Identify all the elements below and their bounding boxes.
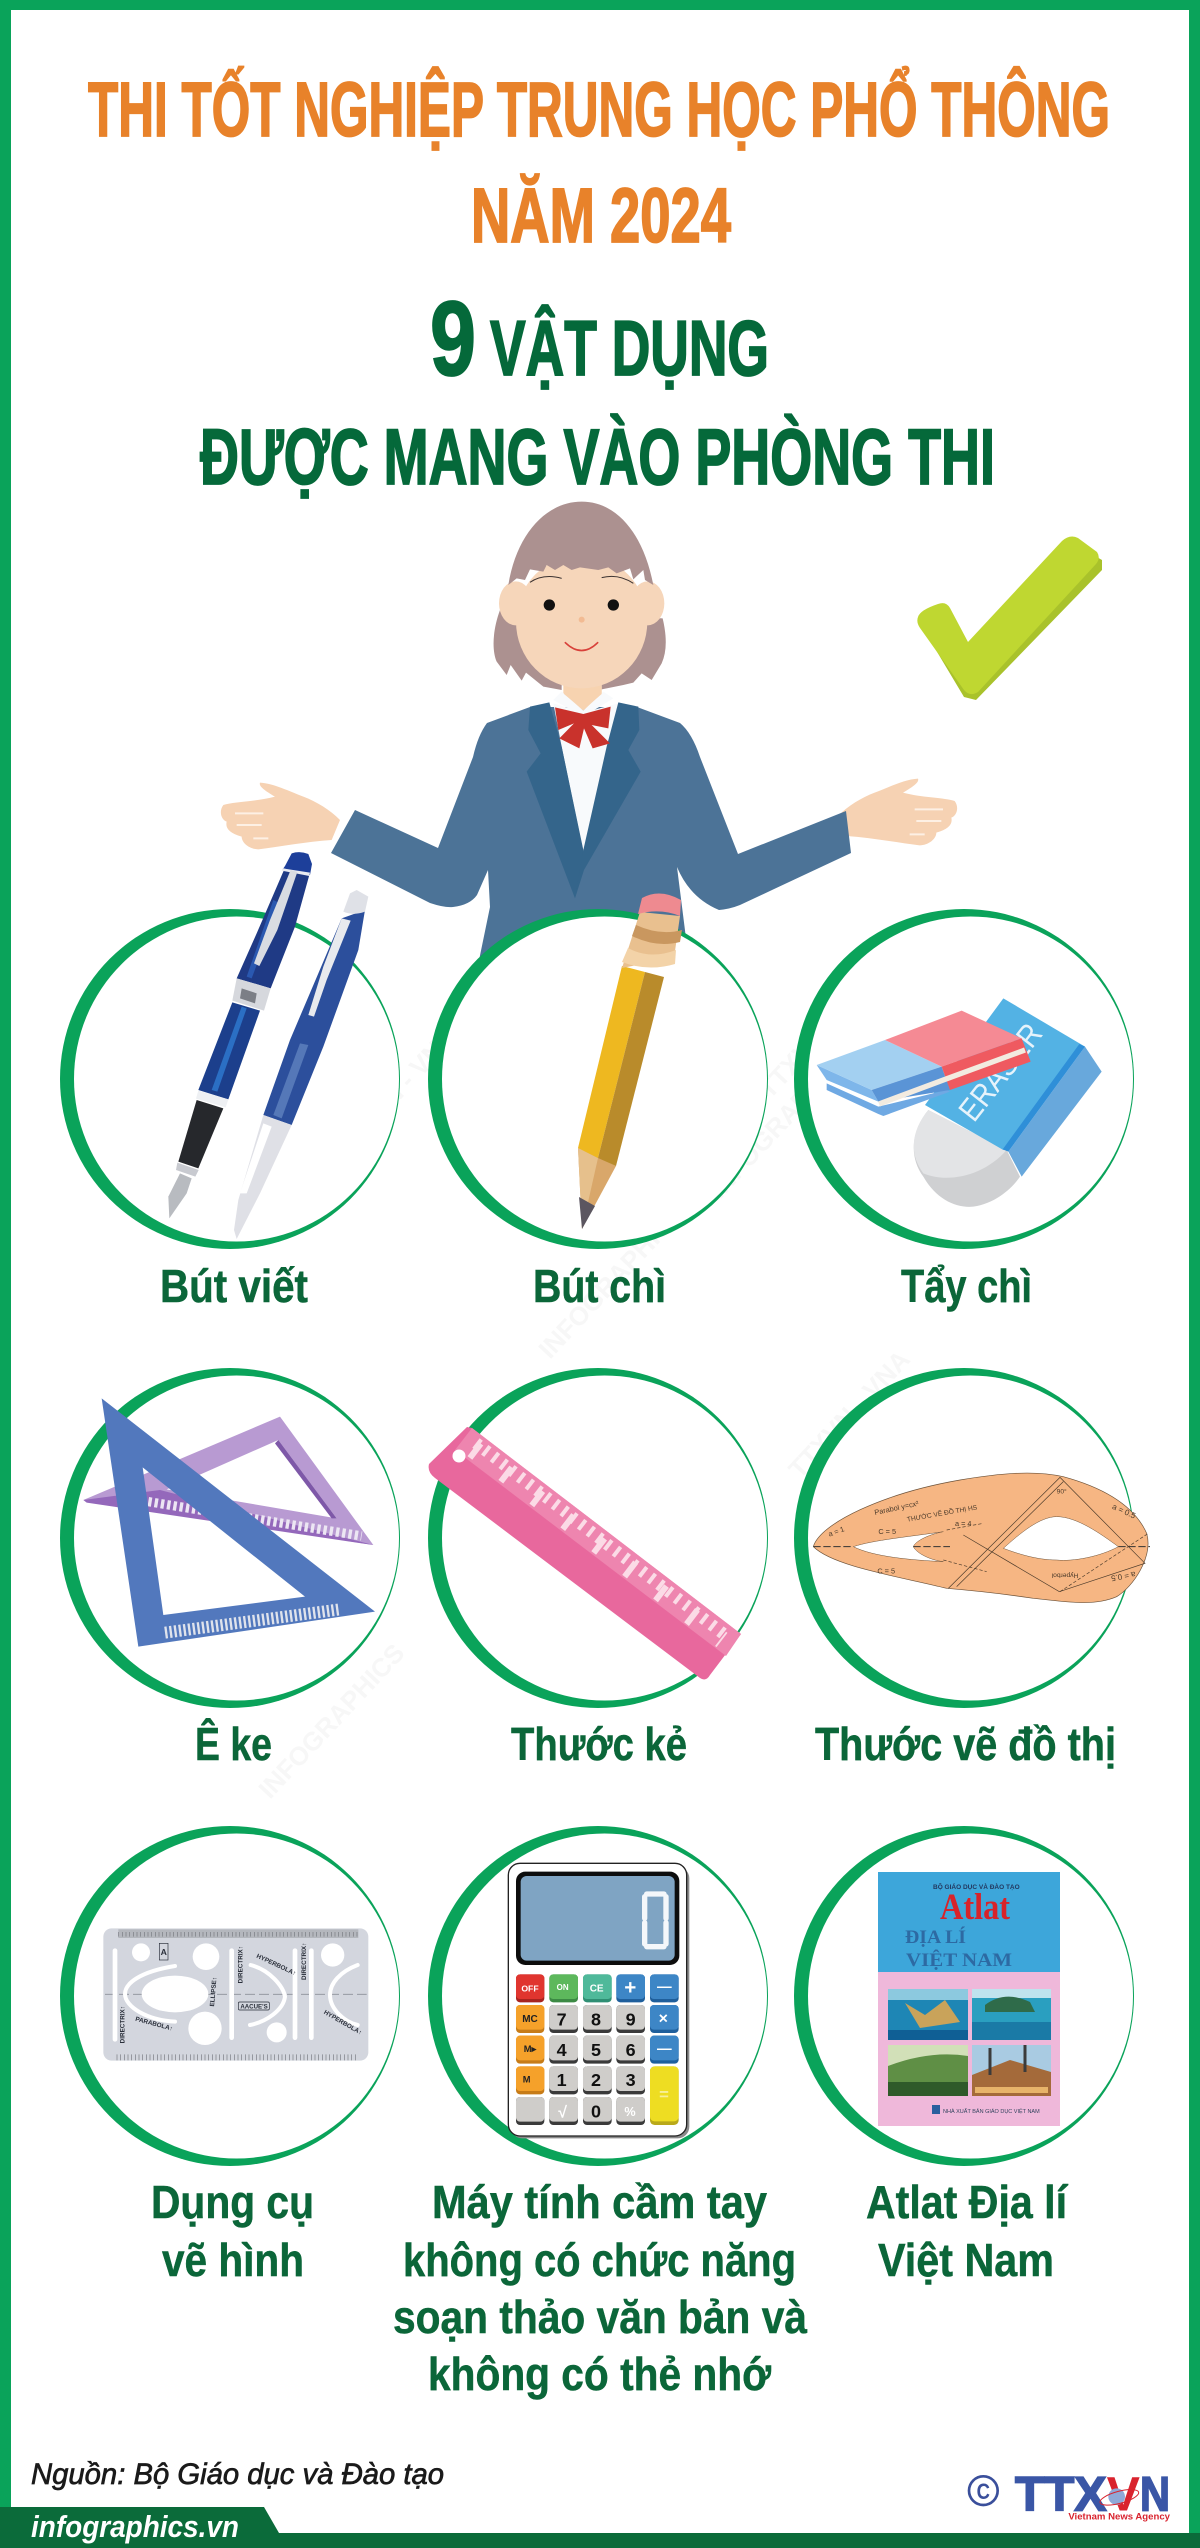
icon: graph curve ruler: THƯỚC VẼ ĐỒ THỊ HS [906,1501,978,1524]
illustration: student with open hands [221,502,957,970]
icon: graph curve ruler [813,1473,1150,1603]
heading: 9 items allowed [200,280,995,501]
logo: TTXVN: N [1140,2468,1170,2522]
icon: atlas book: VIỆT NAM [906,1949,1012,1971]
ring [794,909,1134,1249]
icon: atlas book [878,1872,1060,2126]
jacket [331,707,851,970]
label: không có chức năng [403,2234,796,2286]
icon: graph curve ruler: a = 4 [955,1519,972,1528]
ring [428,909,768,1249]
icon: calculator: OFF [521,1984,539,1994]
title: exam name [88,66,1110,259]
label: Ê ke [195,1718,272,1770]
label: Thước vẽ đồ thị [815,1718,1116,1770]
face features [530,576,633,583]
heading: 9 items allowed: 9 [430,280,476,398]
icon: calculator: × [659,2010,668,2027]
logo: TTXVN [969,2468,1170,2522]
icon: calculator: 0 [591,2101,601,2121]
label: Thước kẻ [511,1718,687,1770]
icon: graph curve ruler: 90° [1057,1487,1067,1495]
icon: atlas book: Atlat [940,1887,1011,1928]
panel: erasers [794,909,1134,1312]
icon: pink ruler [429,1427,741,1679]
icon: check mark [917,537,1102,700]
icon: drawing stencil: A [161,1947,168,1957]
icon: calculator: 3 [626,2070,636,2090]
hands [221,779,957,849]
panel: atlas [794,1826,1134,2286]
icon: calculator: + [624,1976,636,1999]
label: Bút chì [533,1260,666,1312]
photos [888,1989,1051,2096]
watermarks: INFOGRAPHICS [252,1638,410,1804]
icon: calculator: 1 [557,2070,567,2090]
icon: calculator: M [523,2075,531,2085]
icon: calculator: √ [558,2104,567,2121]
icon: pencil [578,893,682,1229]
icon: drawing stencil: PARABOLA↑ [134,2016,174,2033]
title: exam name: NĂM 2024 [471,173,731,259]
icon: set squares [83,1398,375,1647]
watermarks: TTXVN - VNA [329,1021,463,1161]
icon: drawing stencil: HYPERBOLA↑ [322,2009,363,2037]
icon: calculator: ON [557,1983,569,1992]
label: Atlat Địa lí [866,2176,1069,2228]
ring [60,1826,400,2166]
shirt and collar [553,703,618,852]
icon: drawing stencil: DIRECTRIX↑ [301,1943,308,1980]
label: Máy tính cầm tay [432,2176,767,2228]
panel: drawing stencil [60,1826,400,2286]
label [393,2176,807,2400]
icon: graph curve ruler: Parabol y=cx² [874,1499,920,1517]
ring [428,1368,768,1708]
icon: calculator [508,1863,689,2138]
icon: graph curve ruler: C = 5 [878,1527,896,1536]
icon: atlas book: ĐỊA LÍ [905,1926,966,1948]
label [151,2176,314,2286]
icon: drawing stencil: AACUE'S [240,2004,268,2010]
icon: calculator: 7 [557,2009,567,2029]
icon: calculator: CE [590,1983,604,1994]
logo: TTXVN: TTX [1015,2468,1107,2522]
watermarks: TTXVN - VNA [782,1344,916,1484]
icon: atlas book: NHÀ XUẤT BẢN GIÁO DỤC VIỆT NAM [943,2107,1040,2115]
icon: calculator: 4 [557,2040,567,2060]
heading: 9 items allowed: VẬT DỤNG [490,304,769,392]
icon: calculator: — [657,2041,672,2057]
panel: graph ruler [794,1368,1150,1770]
icon: two pens [168,852,368,1239]
footer bar with site name [0,2507,1200,2548]
logo: TTXVN: Vietnam News Agency [1068,2512,1170,2522]
icon: calculator: 2 [591,2070,601,2090]
icon: atlas book: BỘ GIÁO DỤC VÀ ĐÀO TẠO [933,1882,1020,1891]
icon: drawing stencil: DIRECTRIX↑ [238,1946,245,1983]
icon: erasers [817,998,1102,1207]
icon: calculator: 9 [626,2009,636,2029]
icon: calculator: 5 [591,2040,601,2060]
icon: drawing stencil: ELLIPSE↑ [209,1977,219,2007]
ring [794,1368,1134,1708]
logo: TTXVN: V [1107,2468,1141,2522]
icon: graph curve ruler: C = 5 [877,1566,895,1575]
source note: Nguồn: Bộ Giáo dục và Đào tạo [31,2458,444,2491]
label: soạn thảo văn bản và [393,2291,807,2343]
icon: drawing stencil [103,1928,368,2061]
watermarks: INFOGRAPHICS [532,1198,690,1364]
icon: calculator: M▸ [524,2044,537,2054]
icon: graph curve ruler: a = 0.5 [1111,1502,1137,1521]
ring [60,909,400,1249]
panel: pens [60,852,400,1312]
label: Việt Nam [878,2234,1054,2286]
icon: calculator: — [657,1980,672,1996]
label [866,2176,1069,2286]
logo: TTXVN: C [977,2479,990,2504]
panel: pencil [428,893,768,1312]
label: Dụng cụ [151,2176,314,2228]
watermarks: TTXVN - VNA [752,964,886,1104]
panel: set squares [60,1368,400,1770]
icon: calculator: 6 [626,2040,636,2060]
footer bar with site name: infographics.vn [31,2509,239,2544]
label: vẽ hình [162,2234,304,2286]
ring [60,1368,400,1708]
label: Tẩy chì [901,1260,1032,1312]
head and hair [494,502,666,898]
lapels [527,702,583,898]
icon: graph curve ruler: a = 1 [827,1524,846,1539]
icon: graph curve ruler: a = 0.5 [1110,1570,1136,1583]
icon: calculator: = [659,2085,669,2104]
watermarks: INFOGRAPHICS [702,1038,860,1204]
label: không có thẻ nhớ [428,2348,771,2400]
icon: calculator: 8 [591,2009,601,2029]
label: Bút viết [160,1260,308,1312]
icon: calculator: % [624,2105,636,2119]
watermarks [252,964,916,1804]
icon: erasers: ERASER [951,1016,1049,1128]
panel: ruler [428,1368,768,1770]
icon: drawing stencil: HYPERBOLA↑ [255,1953,297,1977]
panel: calculator [393,1826,807,2400]
icon: drawing stencil: DIRECTRIX↑ [119,2006,126,2043]
icon: calculator: MC [522,2014,538,2025]
bow tie [555,707,611,748]
ring [794,1826,1134,2166]
ring [428,1826,768,2166]
icon: graph curve ruler: Hyperbol [1051,1571,1078,1578]
